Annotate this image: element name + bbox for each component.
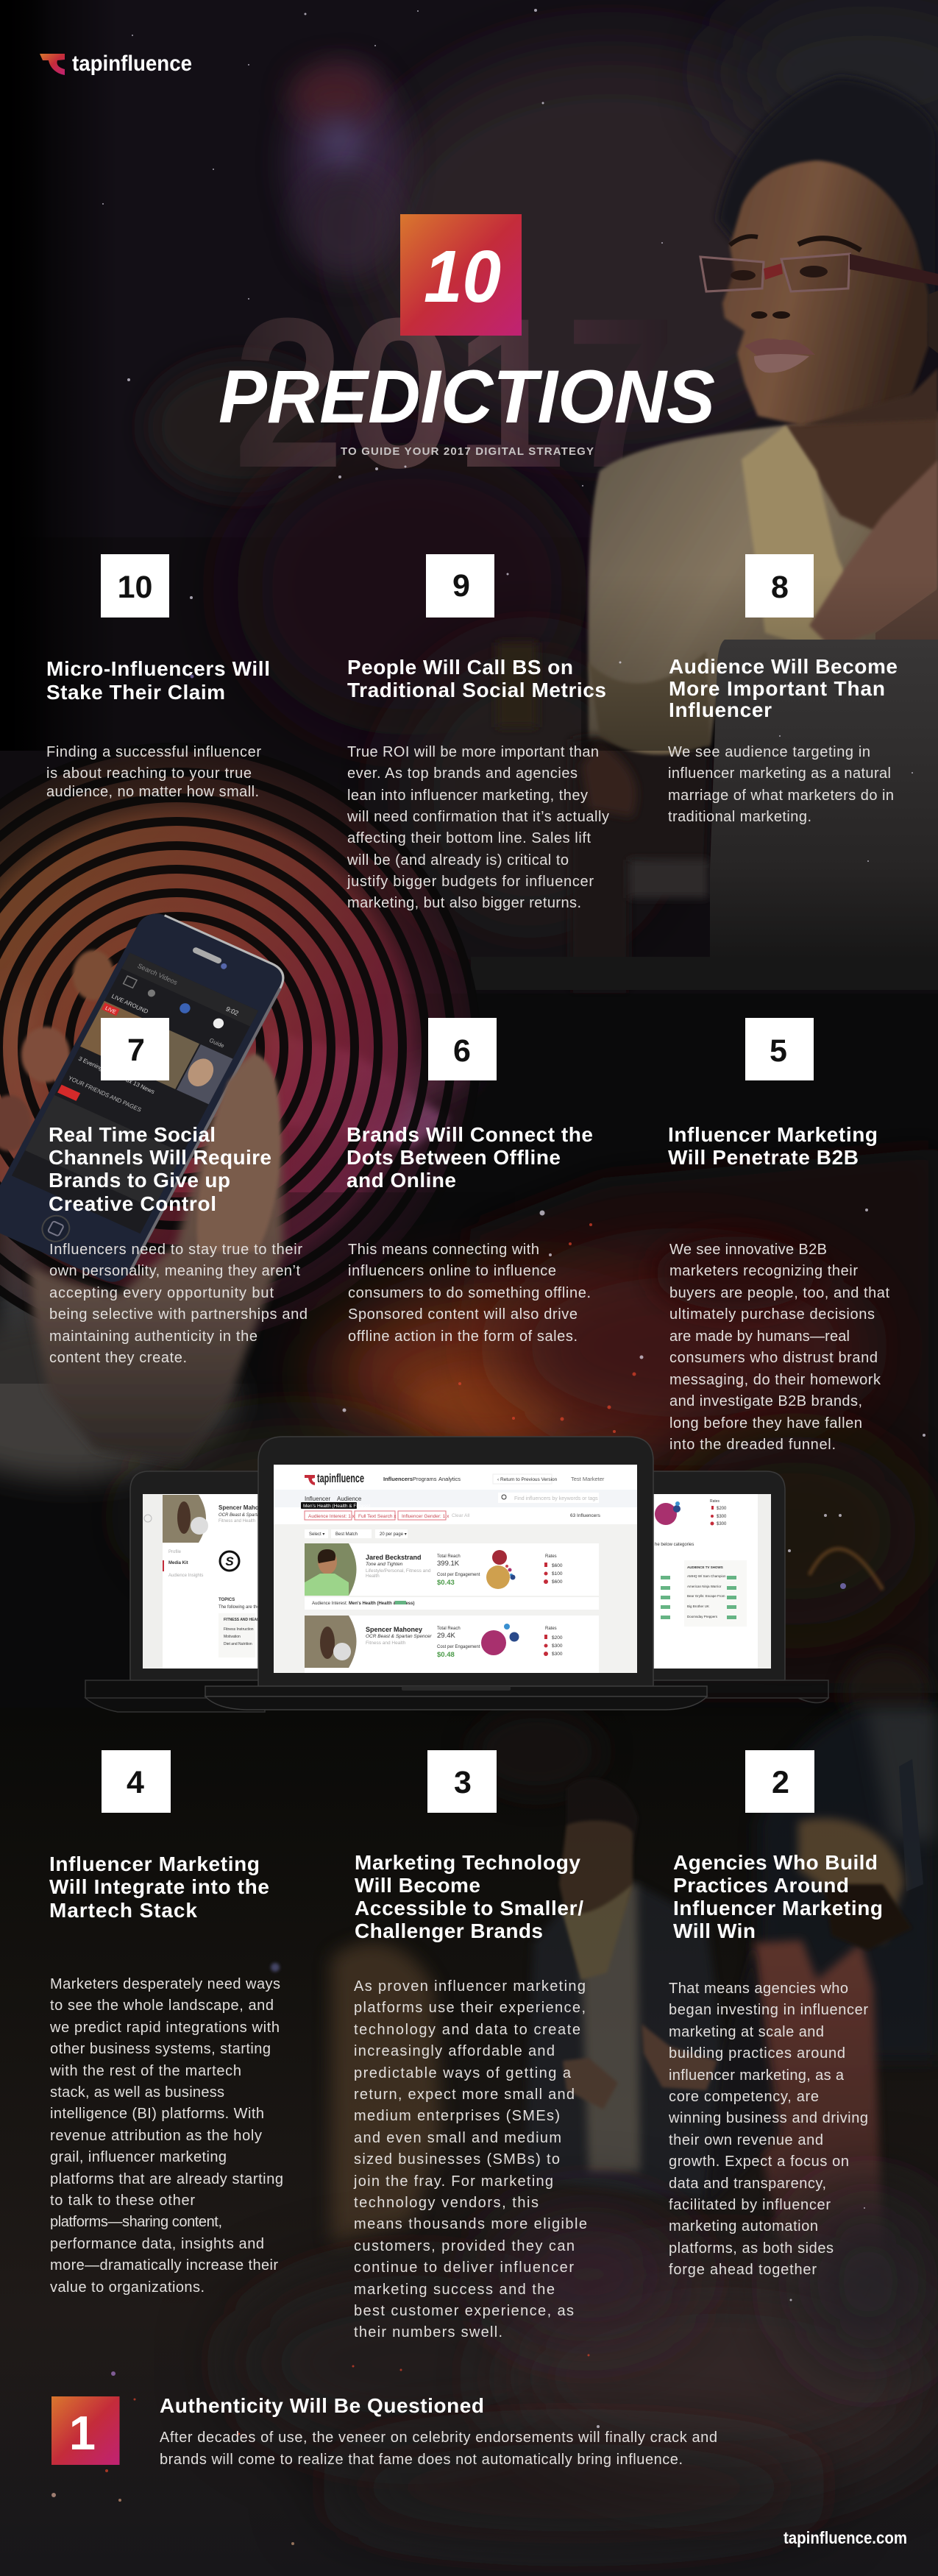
- body text: As proven influencer marketing: [354, 1978, 586, 1995]
- icon: phone: LIVE: [104, 1006, 117, 1015]
- body text: traditional marketing.: [668, 809, 811, 825]
- influencer card: Jared: Tone and Tighten: [366, 1562, 403, 1567]
- body text: and even small and medium: [354, 2130, 561, 2146]
- body text: growth. Expect a focus on: [669, 2154, 849, 2170]
- background: ghost 2017 numerals: 2017: [233, 274, 676, 512]
- laptop: right: [647, 1471, 828, 1703]
- body text: True ROI will be more important than: [347, 744, 599, 760]
- number box: 2: [772, 1765, 789, 1800]
- body text: platforms—sharing content,: [50, 2214, 222, 2230]
- body text: buyers are people, too, and that: [669, 1285, 889, 1301]
- number box: [745, 1018, 814, 1080]
- heading: Agencies Who Build: [673, 1851, 878, 1874]
- laptop: right: he below categories: [655, 1543, 694, 1547]
- app screen: Clear All: [452, 1513, 470, 1518]
- heading: Will Become: [355, 1874, 480, 1897]
- influencer card: Spencer: OCR Beast & Spartan Spencer: [366, 1634, 432, 1639]
- number box: 10: [118, 570, 152, 605]
- laptop: right: Big Brother UK: [687, 1604, 709, 1608]
- body text: facilitated by influencer: [669, 2197, 831, 2213]
- body text: messaging, do their homework: [669, 1372, 881, 1388]
- laptop: left: Fitness Instruction: [224, 1627, 254, 1632]
- body text: brands will come to realize that fame does not automatically bring influence.: [160, 2452, 683, 2468]
- body text: marriage of what marketers do in: [668, 788, 894, 804]
- heading: Will Penetrate B2B: [668, 1146, 859, 1169]
- body text: to talk to these other: [50, 2193, 195, 2209]
- influencer card: Jared: Health: [366, 1574, 380, 1579]
- body text: join the fray. For marketing: [353, 2173, 553, 2190]
- body text: long before they have fallen: [669, 1415, 862, 1432]
- panel: prediction 10: [46, 554, 270, 800]
- laptop: right: $300: [717, 1515, 727, 1519]
- body text: technology vendors, this: [354, 2195, 539, 2211]
- body text: predictable ways of getting a: [354, 2065, 572, 2081]
- photo: backdrop behind hand: [0, 957, 938, 1479]
- number box: [101, 1018, 169, 1080]
- badge: 10: 10: [424, 236, 501, 318]
- background: middle nebula: [140, 1148, 938, 1693]
- laptop: right: AUDIENCE TV SHOWS: [687, 1565, 723, 1569]
- number box: [426, 554, 494, 618]
- influencer card: Jared: Total Reach: [437, 1554, 461, 1559]
- body text: maintaining authenticity in the: [49, 1328, 257, 1345]
- body text: customers, provided they can: [354, 2238, 575, 2254]
- influencer card: Spencer: $300: [552, 1652, 563, 1657]
- body text: marketing automation: [669, 2218, 818, 2234]
- influencer card: Spencer: [305, 1616, 599, 1673]
- background: upper nebula: [0, 0, 938, 942]
- number box: [101, 554, 169, 618]
- body text: grail, influencer marketing: [50, 2149, 227, 2165]
- body text: [160, 2430, 717, 2468]
- body text: being selective with partnerships and: [49, 1306, 308, 1323]
- body text: began investing in influencer: [669, 2002, 868, 2018]
- influencer card: Spencer: $0.48: [437, 1651, 455, 1659]
- body text: platforms use their experience,: [354, 2000, 586, 2016]
- photo: hand holding phone: [0, 907, 289, 1465]
- heading: Martech Stack: [49, 1899, 197, 1922]
- panel: prediction 2: [668, 1750, 883, 2278]
- heading: Practices Around: [673, 1874, 849, 1897]
- body text: marketing success and the: [354, 2282, 555, 2298]
- body text: performance data, insights and: [50, 2236, 264, 2252]
- number box: 7: [127, 1033, 145, 1068]
- number box: 3: [454, 1765, 472, 1800]
- heading: Influencer: [669, 698, 772, 721]
- panel: prediction 4: [49, 1750, 283, 2296]
- icon: phone: Fox 13 News: [121, 1075, 156, 1095]
- panel: prediction 1: [51, 2394, 717, 2468]
- influencer card: Jared: Cost per Engagement: [437, 1573, 480, 1577]
- body text: building practices around: [669, 2045, 845, 2062]
- body text: Marketers desperately need ways: [50, 1976, 280, 1992]
- body text: into the dreaded funnel.: [669, 1437, 836, 1453]
- influencer card: Jared: [305, 1543, 599, 1610]
- body text: value to organizations.: [50, 2279, 205, 2296]
- body text: Influencers need to stay true to their: [49, 1242, 302, 1258]
- app screen: Analytics: [438, 1476, 461, 1482]
- icon: phone: LIVE AROUND: [110, 993, 149, 1015]
- panel: prediction 5: [668, 1018, 889, 1453]
- body text: increasingly affordable and: [354, 2043, 555, 2059]
- body text: [347, 744, 609, 911]
- body text: own personality, meaning they aren’t: [49, 1263, 300, 1279]
- app screen: Best Match: [335, 1532, 358, 1537]
- laptop: front: [205, 1437, 707, 1710]
- influencer card: Spencer: Spencer Mahoney: [366, 1626, 422, 1633]
- influencer card: Jared: $600: [552, 1579, 563, 1585]
- heading: Influencer Marketing: [668, 1123, 878, 1146]
- number box: 9: [452, 568, 470, 604]
- icon: phone: YOUR FRIENDS AND PAGES: [67, 1075, 143, 1114]
- laptop: left: Motivation: [224, 1635, 241, 1639]
- heading: Brands Will Connect the: [347, 1123, 593, 1146]
- badge: 10: [400, 214, 522, 336]
- app screen: 63 Influencers: [570, 1513, 601, 1518]
- laptop: left: S: [225, 1554, 234, 1568]
- body text: content they create.: [49, 1350, 187, 1366]
- app screen: tapinfluence: [317, 1471, 364, 1485]
- influencer card: Jared: $600: [552, 1563, 563, 1568]
- subtitle: TO GUIDE YOUR 2017 DIGITAL STRATEGY: [341, 445, 594, 458]
- laptop: left: Fitness and Health: [218, 1519, 255, 1524]
- app screen: Audience Interest: 1 x: [308, 1514, 355, 1519]
- heading: predictions: PREDICTIONS: [218, 355, 715, 439]
- app screen: Audience: [337, 1496, 362, 1502]
- app screen: Influencer Gender: 1 x: [402, 1514, 450, 1519]
- number box: 1: [69, 2406, 96, 2460]
- body text: platforms, as both sides: [669, 2240, 834, 2257]
- laptop: right: $200: [717, 1507, 727, 1511]
- heading: Stake Their Claim: [46, 681, 225, 704]
- panel: prediction 8: [668, 554, 898, 825]
- laptop: left: Spencer Mahoney: [218, 1504, 269, 1511]
- photo: woman with glasses: [497, 77, 938, 990]
- footer url: tapinfluence.com: [784, 2528, 907, 2547]
- body text: continue to deliver influencer: [354, 2260, 574, 2276]
- heading: Micro-Influencers Will: [46, 657, 270, 680]
- number box: 8: [771, 570, 789, 605]
- panel: prediction 3: [353, 1750, 587, 2340]
- body text: accepting every opportunity but: [49, 1285, 274, 1301]
- number box: 5: [770, 1033, 787, 1069]
- heading: Creative Control: [49, 1192, 216, 1215]
- icon: logo mark: [40, 54, 65, 75]
- heading: [49, 1853, 269, 1922]
- body text: will be (and already is) critical to: [347, 852, 569, 868]
- laptops mockup: [85, 1437, 828, 1712]
- concentric rings graphic: [0, 744, 515, 1384]
- body text: marketers recognizing their: [669, 1263, 858, 1279]
- body text: other business systems, starting: [50, 2041, 271, 2057]
- app screen: Find influencers by keywords or tags: [514, 1496, 598, 1501]
- heading: [669, 655, 898, 721]
- influencer card: Jared: $0.43: [437, 1579, 455, 1587]
- body text: [353, 1978, 587, 2340]
- logo: tapinfluence: tapinfluence: [72, 52, 192, 76]
- heading: [46, 657, 270, 704]
- body text: affecting their bottom line. Sales lift: [347, 830, 591, 846]
- panel: prediction 9: [347, 554, 609, 911]
- body text: consumers to do something offline.: [348, 1285, 591, 1301]
- laptop: left: Audience Insights: [168, 1574, 203, 1578]
- body text: stack, as well as business: [50, 2084, 224, 2101]
- heading: Influencer Marketing: [49, 1853, 260, 1875]
- background: lower party scene: [235, 1652, 938, 2532]
- influencer card: Jared: Rates: [545, 1554, 557, 1559]
- body text: This means connecting with: [348, 1242, 539, 1258]
- body text: audience, no matter how small.: [46, 784, 259, 800]
- icon: phone: [0, 907, 289, 1288]
- app screen: Influencer: [305, 1496, 330, 1502]
- heading: Will Win: [673, 1919, 756, 1942]
- body text: offline action in the form of sales.: [348, 1328, 578, 1345]
- body text: [348, 1242, 591, 1345]
- heading: Marketing Technology: [355, 1851, 580, 1874]
- body text: That means agencies who: [669, 1981, 848, 1997]
- body text: We see audience targeting in: [668, 744, 870, 760]
- heading: [673, 1851, 883, 1942]
- heading: [347, 1123, 593, 1192]
- heading: Accessible to Smaller/: [355, 1897, 583, 1919]
- icon: phone: 9:02: [224, 1005, 240, 1017]
- body text: [49, 1242, 308, 1366]
- app screen: Programs: [413, 1476, 437, 1482]
- body text: Finding a successful influencer: [46, 744, 261, 760]
- body text: influencer marketing as a natural: [668, 765, 891, 782]
- influencer card: Spencer: Total Reach: [437, 1627, 461, 1631]
- laptop: right: $300: [717, 1522, 727, 1526]
- influencer card: Spencer: $200: [552, 1635, 563, 1641]
- influencer card: Spencer: $300: [552, 1643, 563, 1649]
- number box: [428, 1018, 497, 1080]
- body text: is about reaching to your true: [46, 765, 252, 782]
- heading: Real Time Social: [49, 1123, 216, 1146]
- influencer card: Jared: $100: [552, 1571, 563, 1577]
- heading: [355, 1851, 583, 1942]
- number box: 4: [127, 1765, 144, 1800]
- laptop: right: Bear Grylls: Escape From: [687, 1594, 725, 1598]
- laptop: left: OCR Beast & Spartan Spencer: [218, 1513, 280, 1518]
- body text: ultimately purchase decisions: [669, 1306, 875, 1323]
- body text: influencer marketing, as a: [669, 2067, 845, 2084]
- body text: their numbers swell.: [354, 2324, 502, 2340]
- body text: winning business and driving: [668, 2110, 868, 2126]
- body text: and investigate B2B brands,: [669, 1393, 862, 1409]
- body text: best customer experience, as: [354, 2303, 574, 2319]
- body text: more—dramatically increase their: [50, 2257, 278, 2274]
- body text: [46, 744, 261, 800]
- influencer card: Spencer: Cost per Engagement: [437, 1645, 480, 1649]
- influencer card: Jared: Audience Interest: Men's Health (Health & Fitness): [312, 1602, 414, 1606]
- influencer card: Jared: 399.1K: [437, 1560, 460, 1568]
- influencer card: Spencer: 29.4K: [437, 1632, 455, 1640]
- app screen: Influencers: [383, 1476, 413, 1482]
- heading: Influencer Marketing: [673, 1897, 883, 1919]
- app screen: 20 per page ▾: [380, 1532, 407, 1537]
- laptop: left: The following are the topics: [218, 1605, 272, 1610]
- body text: return, expect more small and: [354, 2087, 575, 2103]
- body text: [49, 1976, 283, 2296]
- panel: prediction 7: [49, 1018, 308, 1366]
- body text: Sponsored content will also drive: [348, 1306, 578, 1323]
- body text: to see the whole landscape, and: [50, 1998, 274, 2014]
- body text: ever. As top brands and agencies: [347, 765, 578, 782]
- influencer card: Spencer: Fitness and Health: [366, 1641, 406, 1646]
- number box: [745, 1750, 814, 1813]
- body text: forge ahead together: [669, 2262, 817, 2278]
- laptop: left: Profile: [168, 1550, 182, 1554]
- body text: sized businesses (SMBs) to: [354, 2151, 560, 2168]
- heading: [668, 1123, 878, 1169]
- body text: [668, 1981, 868, 2278]
- body text: will need confirmation that it’s actually: [347, 809, 609, 825]
- laptop: right: Doomsday Preppers: [687, 1615, 718, 1618]
- heading: Traditional Social Metrics: [347, 679, 606, 701]
- number box: 6: [453, 1033, 471, 1069]
- number box: [102, 1750, 171, 1813]
- heading: and Online: [347, 1169, 456, 1192]
- body text: we predict rapid integrations with: [49, 2020, 280, 2036]
- app screen: Select ▾: [309, 1532, 324, 1537]
- panel: prediction 6: [347, 1018, 593, 1345]
- body text: means thousands more eligible: [354, 2216, 587, 2232]
- body text: We see innovative B2B: [669, 1242, 827, 1258]
- laptop: right: American Ninja Warrior: [687, 1585, 722, 1588]
- laptop behind prediction 8: [710, 640, 938, 990]
- body text: consumers who distrust brand: [669, 1350, 878, 1366]
- heading: Channels Will Require: [49, 1146, 271, 1169]
- laptop: right: Rates: [710, 1499, 720, 1504]
- body text: with the rest of the martech: [49, 2063, 241, 2079]
- body text: core competency, are: [669, 2089, 819, 2105]
- laptop: left: Media Kit: [168, 1561, 188, 1565]
- body text: marketing, but also bigger returns.: [347, 895, 581, 911]
- laptop: right: AMHQ W/ Sam Champion: [687, 1574, 726, 1578]
- laptop: left: TOPICS: [218, 1598, 235, 1602]
- heading: Dots Between Offline: [347, 1146, 561, 1169]
- app screen: [274, 1465, 637, 1673]
- influencer card: Jared: Jared Beckstrand: [366, 1554, 422, 1561]
- laptop: left: Diet and Nutrition: [224, 1642, 252, 1646]
- app screen: ‹ Return to Previous Version: [497, 1477, 558, 1482]
- body text: data and transparency,: [669, 2176, 826, 2192]
- body text: [669, 1242, 889, 1453]
- title block: [218, 214, 715, 458]
- body text: influencers online to influence: [348, 1263, 556, 1279]
- body text: marketing at scale and: [669, 2024, 824, 2040]
- heading: People Will Call BS on: [347, 656, 573, 679]
- body text: After decades of use, the veneer on celebrity endorsements will finally crack and: [160, 2430, 717, 2446]
- heading: [49, 1123, 271, 1215]
- body text: technology and data to create: [354, 2022, 580, 2038]
- heading: Authenticity Will Be Questioned: [160, 2394, 484, 2417]
- heading: Brands to Give up: [49, 1169, 230, 1192]
- app screen: Full Text Search x: [358, 1514, 397, 1519]
- icon: phone: 3 Evening...: [77, 1055, 109, 1074]
- icon: phone: Search Videos: [136, 962, 179, 986]
- laptop: left: FITNESS AND HEALTH: [224, 1618, 264, 1622]
- heading: Challenger Brands: [355, 1919, 543, 1942]
- body text: [668, 744, 894, 825]
- body text: intelligence (BI) platforms. With: [50, 2106, 264, 2122]
- app screen: Men's Health (Health & Fitness): [303, 1504, 371, 1509]
- influencer card: Jared: Lifestyle/Personal, Fitness and: [366, 1568, 431, 1574]
- heading: More Important Than: [669, 677, 885, 700]
- body text: their own revenue and: [669, 2132, 823, 2148]
- heading: Will Integrate into the: [49, 1875, 269, 1898]
- body text: platforms that are already starting: [50, 2171, 283, 2187]
- icon: phone: Guide: [208, 1037, 226, 1050]
- number box: [427, 1750, 497, 1813]
- heading: [347, 656, 606, 701]
- body text: revenue attribution as the holy: [50, 2128, 262, 2144]
- body text: are made by humans—real: [669, 1328, 850, 1345]
- body text: lean into influencer marketing, they: [347, 788, 588, 804]
- number box: [745, 554, 814, 618]
- heading: Audience Will Become: [669, 655, 898, 678]
- number box: [51, 2396, 119, 2465]
- laptop: left: [85, 1471, 280, 1712]
- body text: medium enterprises (SMEs): [354, 2108, 560, 2124]
- body text: justify bigger budgets for influencer: [347, 874, 594, 890]
- app screen: Test Marketer: [571, 1476, 605, 1482]
- influencer card: Spencer: Rates: [545, 1627, 557, 1631]
